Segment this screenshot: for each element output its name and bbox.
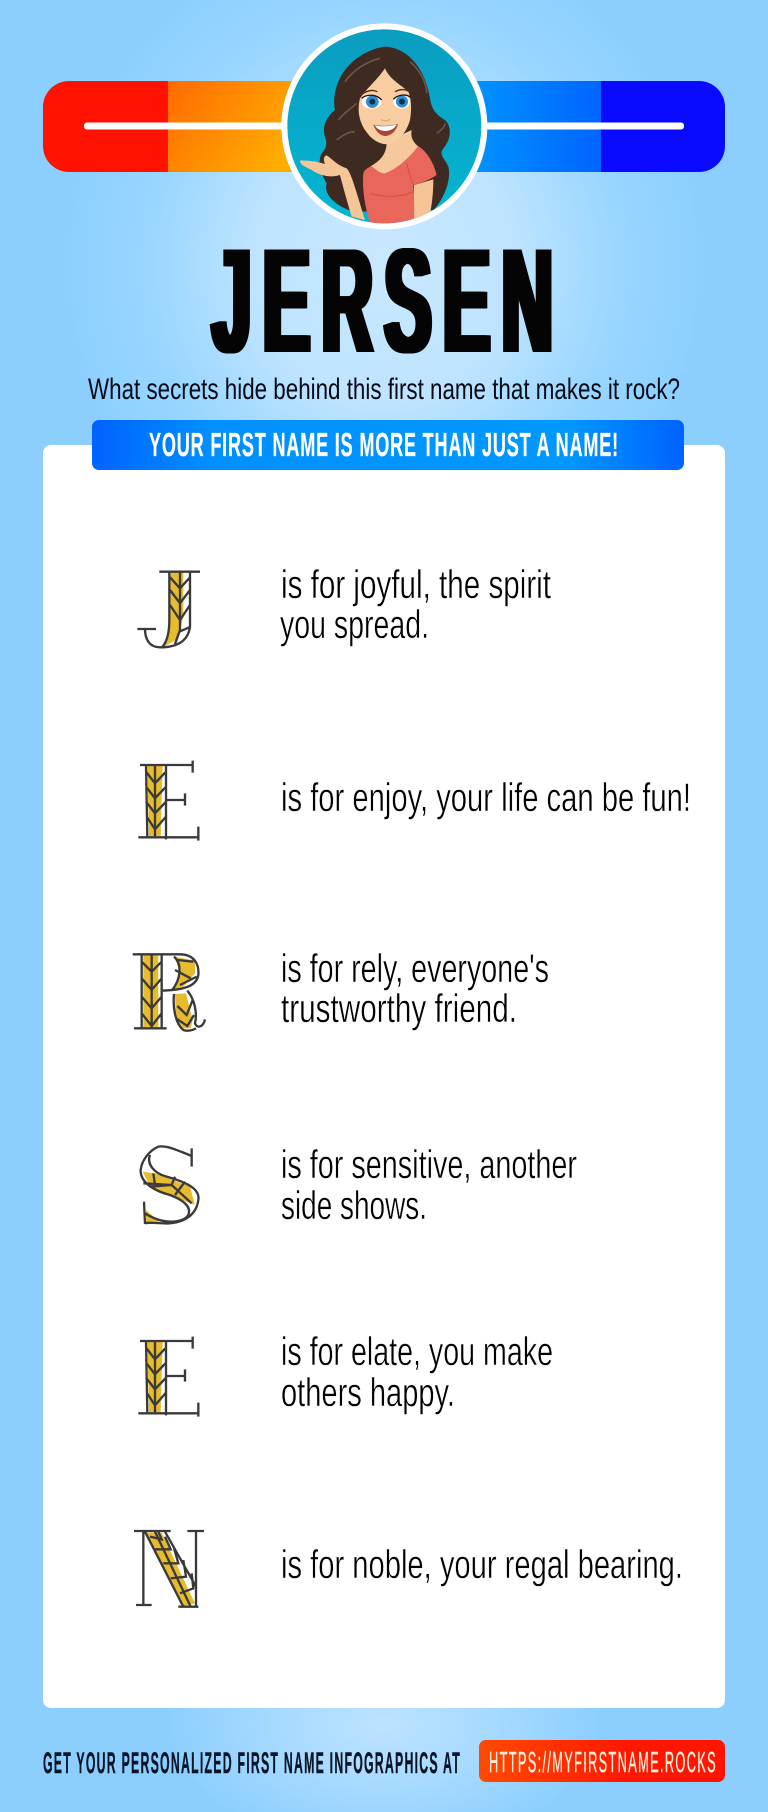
description E: others happy. — [281, 1371, 455, 1415]
row: S — [141, 1143, 577, 1228]
description E — [281, 1330, 553, 1415]
icon: letter J — [137, 572, 200, 647]
row: R — [133, 947, 549, 1031]
footer url button — [479, 1740, 725, 1782]
title: JERSEN — [212, 217, 564, 384]
row: J — [137, 563, 551, 647]
neck — [370, 130, 420, 175]
description R — [281, 947, 549, 1031]
description S: is for sensitive, another — [281, 1143, 577, 1187]
description E: is for elate, you make — [281, 1330, 553, 1374]
smile — [373, 124, 398, 136]
face — [359, 68, 411, 144]
row: E — [138, 761, 691, 841]
icon: letter S — [141, 1146, 199, 1224]
description R: trustworthy friend. — [281, 987, 517, 1031]
right arm — [413, 179, 433, 222]
description J — [280, 563, 551, 647]
description J: you spread. — [280, 603, 429, 647]
left arm and hand — [300, 155, 365, 220]
panel: white card — [43, 445, 725, 1708]
row: N — [134, 1530, 683, 1607]
icon: letter N — [134, 1530, 204, 1607]
avatar portrait — [281, 23, 487, 229]
description J: is for joyful, the spirit — [281, 563, 551, 607]
banner — [92, 420, 684, 470]
header ribbon bar — [43, 81, 725, 172]
eyes — [362, 95, 382, 109]
description R: is for rely, everyone's — [281, 947, 549, 991]
hair — [320, 47, 450, 212]
shirt — [363, 146, 437, 228]
icon: letter E — [138, 761, 198, 841]
description S: side shows. — [281, 1184, 427, 1228]
icon: letter R — [133, 954, 205, 1031]
icon: letter E — [138, 1337, 198, 1417]
row: E second — [138, 1330, 553, 1417]
description S — [281, 1143, 577, 1228]
